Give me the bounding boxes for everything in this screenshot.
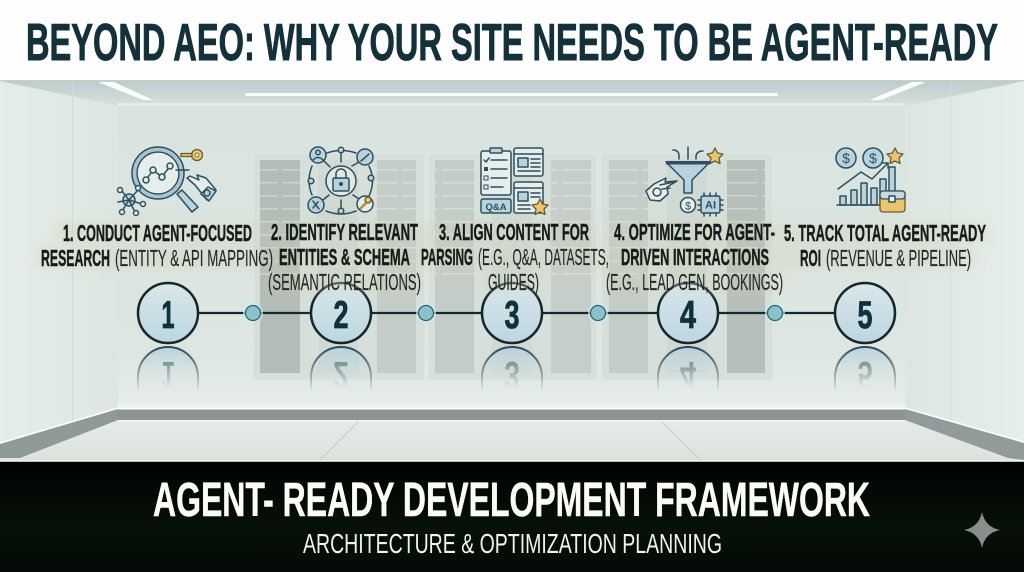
step marker 2	[311, 283, 371, 343]
step marker 1	[138, 283, 198, 343]
step 3 text: PARSING	[421, 244, 473, 270]
step 4 text: (E.G., LEAD GEN, BOOKINGS)	[606, 269, 783, 295]
step 2 icon: lock with entity network	[308, 147, 374, 214]
title band	[0, 0, 1024, 81]
step 2 text: 2. IDENTIFY RELEVANT	[271, 219, 418, 245]
room background	[0, 81, 1024, 461]
step marker 4: 4	[680, 294, 696, 337]
step 4 icon: funnel, robot hand, coin and AI chip	[646, 147, 723, 216]
step 3 icon: checklist, Q&A and document pages	[481, 148, 548, 214]
step marker 3: 3	[504, 294, 520, 337]
step 3 text: 3. ALIGN CONTENT FOR	[439, 219, 589, 245]
step 1 icon: magnifier with graph, key, network and robot hand	[118, 147, 216, 216]
footer band	[0, 460, 1024, 572]
marker reflections: 1	[162, 353, 174, 396]
step marker 3	[482, 283, 542, 343]
footer subheading: ARCHITECTURE & OPTIMIZATION PLANNING	[303, 528, 722, 559]
step 4 text: DRIVEN INTERACTIONS	[621, 244, 769, 270]
timeline connector	[198, 303, 835, 323]
step 5 text	[784, 220, 986, 271]
server racks	[253, 153, 773, 380]
step 5 text: ROI	[800, 245, 821, 271]
beige glow behind step text	[36, 223, 988, 291]
step 3 text: GUIDES)	[488, 269, 539, 295]
step 2 text	[268, 219, 421, 295]
step 1 text: (ENTITY & API MAPPING)	[115, 245, 273, 271]
step marker 2: 2	[334, 294, 348, 337]
step 1 text	[41, 220, 273, 271]
step 5 icon: coins, growth chart and treasure chest: $	[869, 150, 877, 166]
step 1 text: RESEARCH	[41, 245, 110, 271]
step marker 1: 1	[162, 294, 174, 337]
icon: sparkle	[964, 512, 1000, 548]
step 4 icon: funnel, robot hand, coin and AI chip: $	[685, 200, 691, 212]
step 4 text: 4. OPTIMIZE FOR AGENT-	[614, 219, 775, 245]
step 4 icon: funnel, robot hand, coin and AI chip: AI	[705, 200, 716, 212]
step 4 text	[606, 219, 783, 295]
step marker 4	[658, 283, 718, 343]
step 5 icon: coins, growth chart and treasure chest	[836, 148, 905, 212]
marker reflections: 4	[680, 353, 696, 396]
marker reflections: 3	[504, 353, 520, 396]
step 3 text: (E.G., Q&A, DATASETS,	[478, 244, 609, 270]
marker reflections	[138, 347, 895, 396]
step marker 5	[835, 283, 895, 343]
step 3 text	[421, 219, 609, 295]
step marker 5: 5	[858, 294, 872, 337]
step 1 text: 1. CONDUCT AGENT-FOCUSED	[63, 220, 252, 246]
marker reflections: 2	[334, 353, 348, 396]
marker reflections: 5	[858, 353, 872, 396]
step 5 icon: coins, growth chart and treasure chest: $	[842, 150, 850, 166]
step 2 text: ENTITIES & SCHEMA	[279, 244, 410, 270]
step 3 icon: checklist, Q&A and document pages: Q&A	[485, 202, 507, 213]
step 2 text: (SEMANTIC RELATIONS)	[268, 269, 421, 295]
